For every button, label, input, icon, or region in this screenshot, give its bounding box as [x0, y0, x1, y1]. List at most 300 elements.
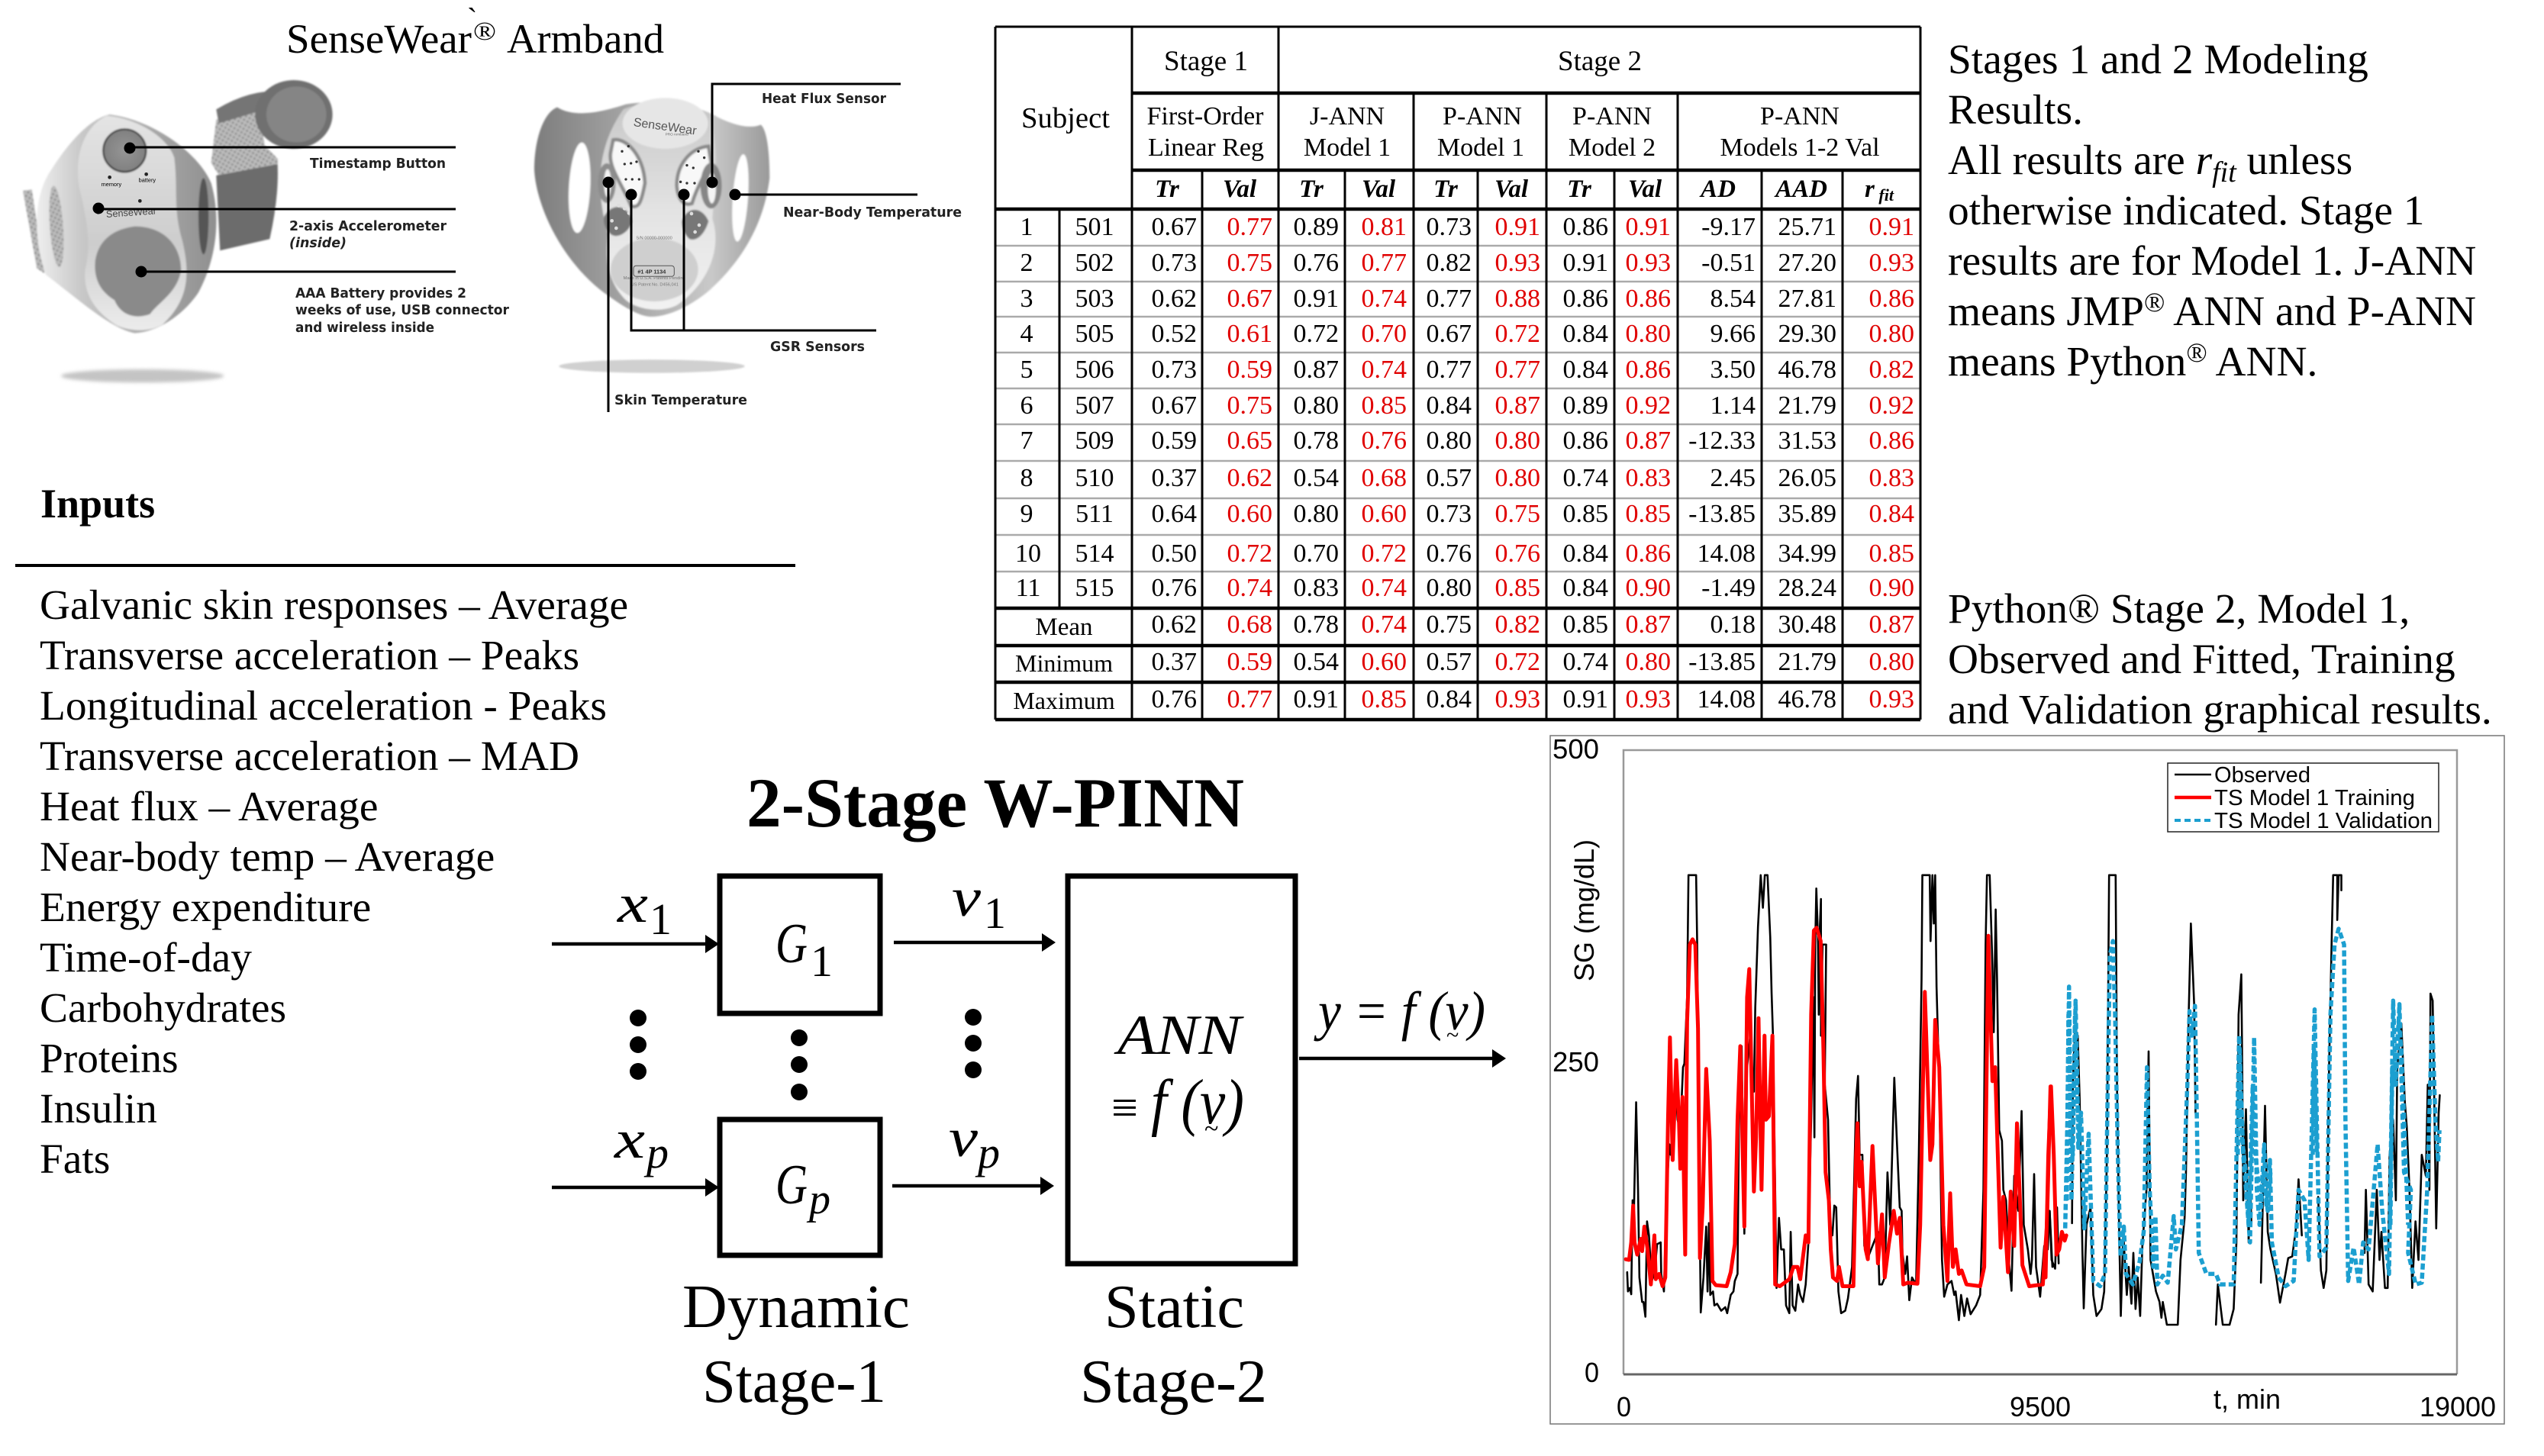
inputs list: Longitudinal acceleration - Peaks — [40, 682, 607, 729]
table summary rows: 0.18 — [1710, 610, 1756, 639]
table body rows: 46.78 — [1778, 356, 1836, 384]
table body rows: 0.77 — [1227, 213, 1272, 241]
table body rows: 0.74 — [1362, 356, 1407, 384]
chart legend: TS Model 1 Validation — [2214, 809, 2433, 833]
table summary rows: 30.48 — [1778, 610, 1836, 639]
table body rows: 0.86 — [1626, 285, 1671, 313]
table body rows: 0.75 — [1227, 391, 1272, 420]
table summary rows: 14.08 — [1698, 685, 1756, 714]
table body rows: 0.73 — [1426, 213, 1472, 241]
chart: observed vs fitted SG over time — [1550, 733, 2504, 1424]
table body rows: 3 — [1020, 285, 1033, 313]
table body rows: 0.80 — [1626, 320, 1671, 348]
table body rows: 0.91 — [1626, 213, 1671, 241]
table body rows: 0.84 — [1869, 500, 1914, 528]
table summary rows: 0.87 — [1626, 610, 1671, 639]
chart axis labels: 250 — [1553, 1046, 1599, 1078]
table body rows — [1015, 213, 1914, 602]
inputs list: Carbohydrates — [40, 984, 286, 1031]
sensor labels: GSR Sensors — [770, 339, 865, 355]
table headers: P-ANN — [1443, 102, 1522, 130]
table body rows: 0.89 — [1563, 391, 1608, 420]
table body rows: 515 — [1075, 574, 1114, 602]
table body rows: 0.74 — [1362, 285, 1407, 313]
table body rows: 0.83 — [1626, 464, 1671, 492]
table body rows: 507 — [1075, 391, 1114, 420]
table summary rows: 0.85 — [1563, 610, 1608, 639]
sensor labels: Near-Body Temperature — [783, 205, 962, 221]
table headers: Tr — [1567, 176, 1592, 203]
text block: modeling results description: All results are r — [1948, 137, 2212, 183]
text block: modeling results description: otherwise indicated. Stage 1 — [1948, 187, 2424, 234]
table body rows: 0.73 — [1151, 249, 1197, 277]
sensor labels: and wireless inside — [295, 320, 434, 336]
table summary rows: 0.37 — [1151, 648, 1197, 676]
chart frame — [1550, 736, 2504, 1424]
inputs list: Energy expenditure — [40, 884, 371, 930]
table headers: r — [1865, 176, 1875, 203]
illustration: armband back view: S/N 00000-000000 — [636, 236, 672, 240]
illustration: armband back view: SenseWear — [633, 116, 698, 138]
table body rows: 0.86 — [1869, 285, 1914, 313]
block G1 — [720, 876, 880, 1013]
table body rows: 0.84 — [1563, 574, 1608, 602]
inputs list: Proteins — [40, 1035, 179, 1081]
table grid — [995, 27, 1920, 720]
chart series — [1626, 875, 2439, 1325]
table summary rows: 0.80 — [1869, 648, 1914, 676]
table summary rows: 0.91 — [1563, 685, 1608, 714]
table body rows: 0.72 — [1293, 320, 1339, 348]
table body rows: 0.74 — [1362, 574, 1407, 602]
illustration: armband front view: battery — [139, 176, 156, 183]
table body rows: 6 — [1020, 391, 1033, 420]
chart legend: Observed — [2214, 763, 2310, 788]
table body rows: 31.53 — [1778, 427, 1836, 455]
table body rows: 1.14 — [1710, 391, 1756, 420]
inputs list — [40, 581, 628, 1182]
table body rows: 0.77 — [1426, 356, 1472, 384]
chart legend: TS Model 1 Training — [2214, 786, 2415, 810]
table body rows: 509 — [1075, 427, 1114, 455]
table body rows: 9 — [1020, 500, 1033, 528]
table summary rows: 0.85 — [1362, 685, 1407, 714]
table headers: Tr — [1299, 176, 1324, 203]
table body rows: 0.75 — [1227, 249, 1272, 277]
chart axis labels: 19000 — [2420, 1391, 2496, 1422]
table body rows: 0.84 — [1563, 320, 1608, 348]
block Gp: p — [806, 1176, 830, 1223]
table headers: Model 1 — [1437, 134, 1524, 162]
illustration: armband back view — [534, 98, 769, 373]
table headers: AD — [1699, 176, 1736, 203]
table body rows: 503 — [1075, 285, 1114, 313]
block ANN: ~ — [1204, 1115, 1218, 1143]
table headers: Model 1 — [1304, 134, 1391, 162]
table headers: First-Order — [1147, 102, 1264, 130]
block ANN — [1068, 876, 1295, 1264]
text block: modeling results description: means Python — [1948, 338, 2186, 385]
chart axis labels — [1553, 733, 2496, 1422]
stage captions: Dynamic — [682, 1272, 910, 1341]
table body rows: 0.72 — [1227, 540, 1272, 568]
table summary rows: 21.79 — [1778, 648, 1836, 676]
table body rows: 0.60 — [1227, 500, 1272, 528]
table body rows: 0.88 — [1494, 285, 1540, 313]
table body rows: 10 — [1015, 540, 1041, 568]
table summary rows: 0.93 — [1869, 685, 1914, 714]
table body rows: 0.67 — [1151, 391, 1197, 420]
table body rows: 502 — [1075, 249, 1114, 277]
table body rows: 0.62 — [1151, 285, 1197, 313]
table summary rows: 46.78 — [1778, 685, 1836, 714]
table headers: J-ANN — [1310, 102, 1385, 130]
chart axis labels: 0 — [1585, 1357, 1599, 1388]
table headers: Val — [1362, 176, 1396, 203]
table body rows: 0.84 — [1563, 540, 1608, 568]
illustration: armband back view: PRO Armband — [666, 132, 688, 136]
table summary rows: 0.57 — [1426, 648, 1472, 676]
table body rows: 0.80 — [1293, 391, 1339, 420]
text block: modeling results description: fit — [2212, 156, 2237, 188]
table headers: P-ANN — [1760, 102, 1839, 130]
table summary rows: 0.84 — [1426, 685, 1472, 714]
chart axis labels: t, min — [2214, 1384, 2281, 1415]
stage captions: Static — [1104, 1272, 1244, 1341]
table body rows: 0.90 — [1869, 574, 1914, 602]
illustration: armband front view: memory — [102, 181, 121, 188]
table body rows: 0.52 — [1151, 320, 1197, 348]
table headers: Linear Reg — [1148, 134, 1264, 162]
table summary rows: 0.87 — [1869, 610, 1914, 639]
inputs rule — [15, 564, 795, 567]
table body rows: 8 — [1020, 464, 1033, 492]
text block: modeling results description: Results. — [1948, 86, 2083, 133]
illustration: armband back view: Made in U.S.A. Patents Pending — [624, 276, 685, 281]
table body rows: 0.68 — [1362, 464, 1407, 492]
table body rows: 0.50 — [1151, 540, 1197, 568]
illustration: armband back view: #1 4P 1134 — [637, 268, 666, 275]
table body rows: 21.79 — [1778, 391, 1836, 420]
signal labels: ~ — [1446, 1023, 1459, 1048]
inputs list: Heat flux – Average — [40, 783, 378, 829]
table headers: Stage 1 — [1164, 46, 1248, 77]
table body rows: 0.87 — [1626, 427, 1671, 455]
arrows — [552, 933, 1506, 1197]
table body rows: 0.60 — [1362, 500, 1407, 528]
table body rows: 0.74 — [1227, 574, 1272, 602]
ellipsis dots — [630, 1009, 982, 1100]
table summary rows: Maximum — [1013, 687, 1115, 714]
chart legend — [2168, 763, 2439, 833]
table body rows: 0.77 — [1362, 249, 1407, 277]
table summary rows: 0.72 — [1494, 648, 1540, 676]
sensor labels: 2-axis Accelerometer — [289, 218, 447, 234]
table headers: Models 1-2 Val — [1720, 134, 1880, 162]
table body rows: 0.70 — [1362, 320, 1407, 348]
signal labels: v — [952, 867, 981, 928]
table body rows: 0.80 — [1869, 320, 1914, 348]
table body rows: 2.45 — [1710, 464, 1756, 492]
table body rows: 0.81 — [1362, 213, 1407, 241]
table headers: Subject — [1021, 102, 1110, 134]
table body rows: 0.64 — [1151, 500, 1197, 528]
table body rows: 0.85 — [1362, 391, 1407, 420]
title: SenseWear Armband: SenseWear — [286, 16, 472, 62]
table body rows: 0.82 — [1426, 249, 1472, 277]
text block: modeling results description — [1948, 36, 2476, 385]
illustration: armband front view — [23, 80, 333, 382]
table body rows: 0.87 — [1293, 356, 1339, 384]
table body rows: 0.80 — [1494, 464, 1540, 492]
signal labels: x — [614, 1109, 645, 1170]
stage captions: Stage-1 — [702, 1347, 886, 1416]
table headers: Val — [1494, 176, 1529, 203]
table body rows: 0.84 — [1563, 356, 1608, 384]
table body rows: 0.80 — [1426, 574, 1472, 602]
table body rows: 0.91 — [1563, 249, 1608, 277]
sensor labels: Timestamp Button — [310, 156, 446, 172]
table summary rows: 0.91 — [1293, 685, 1339, 714]
table body rows: 14.08 — [1698, 540, 1756, 568]
table body rows: 0.77 — [1494, 356, 1540, 384]
text block: modeling results description: means JMP — [1948, 288, 2144, 334]
table body rows: 0.86 — [1869, 427, 1914, 455]
table body rows: 2 — [1020, 249, 1033, 277]
table body rows: 9.66 — [1710, 320, 1756, 348]
title: SenseWear Armband: ` — [467, 2, 477, 36]
table body rows: 29.30 — [1778, 320, 1836, 348]
table body rows: 0.59 — [1227, 356, 1272, 384]
table body rows: 0.57 — [1426, 464, 1472, 492]
table summary rows: -13.85 — [1688, 648, 1756, 676]
text block: graphical results caption — [1948, 585, 2492, 733]
table body rows: -0.51 — [1701, 249, 1756, 277]
table summary rows: 0.74 — [1362, 610, 1407, 639]
table headers: Model 2 — [1569, 134, 1656, 162]
signal labels: v — [949, 1107, 978, 1168]
table summary rows: 0.93 — [1626, 685, 1671, 714]
sensor labels — [289, 91, 962, 408]
table headers: AAD — [1774, 176, 1827, 203]
block ANN: ≡ — [1111, 1082, 1138, 1134]
table body rows: 510 — [1075, 464, 1114, 492]
table body rows: 0.86 — [1563, 427, 1608, 455]
table body rows: 0.80 — [1494, 427, 1540, 455]
sensor labels: Heat Flux Sensor — [762, 91, 886, 107]
table body rows: 0.59 — [1151, 427, 1197, 455]
inputs list: Time-of-day — [40, 934, 252, 981]
table body rows: 0.90 — [1626, 574, 1671, 602]
table headers: Tr — [1155, 176, 1180, 203]
table body rows: 0.75 — [1494, 500, 1540, 528]
table body rows: 0.73 — [1426, 500, 1472, 528]
signal labels: p — [975, 1128, 1000, 1177]
table body rows: 5 — [1020, 356, 1033, 384]
text block: graphical results caption: and Validation graphical results. — [1948, 686, 2492, 733]
table summary rows: 0.62 — [1151, 610, 1197, 639]
table headers: Val — [1628, 176, 1662, 203]
stage captions: Stage-2 — [1080, 1347, 1267, 1416]
table headers: P-ANN — [1572, 102, 1652, 130]
chart axis labels: 9500 — [2010, 1391, 2071, 1422]
title: SenseWear Armband: ® — [473, 18, 496, 46]
table summary rows: 0.82 — [1494, 610, 1540, 639]
signal labels — [614, 867, 1485, 1177]
table body rows: 4 — [1020, 320, 1033, 348]
table summary rows — [1013, 610, 1914, 714]
table body rows: 0.92 — [1626, 391, 1671, 420]
table body rows: 0.76 — [1293, 249, 1339, 277]
table summary rows: 0.68 — [1227, 610, 1272, 639]
table body rows: 0.93 — [1494, 249, 1540, 277]
table body rows: 0.85 — [1869, 540, 1914, 568]
text block: modeling results description: ® — [2186, 337, 2207, 368]
text block: modeling results description: Stages 1 and 2 Modeling — [1948, 36, 2368, 82]
signal labels: x — [617, 873, 648, 934]
illustration: armband back view: US Patent No. D456,041 — [631, 283, 679, 288]
table body rows: 0.76 — [1426, 540, 1472, 568]
table body rows: 7 — [1020, 427, 1033, 455]
table body rows: 3.50 — [1710, 356, 1756, 384]
block G1: 1 — [811, 936, 833, 986]
table body rows: 26.05 — [1778, 464, 1836, 492]
table body rows: 505 — [1075, 320, 1114, 348]
table body rows: 0.80 — [1293, 500, 1339, 528]
table headers — [1021, 46, 1894, 205]
table body rows: 511 — [1075, 500, 1114, 528]
table body rows: 0.37 — [1151, 464, 1197, 492]
heading: Inputs: Inputs — [40, 481, 155, 527]
table body rows: 8.54 — [1710, 285, 1756, 313]
table body rows: 0.87 — [1494, 391, 1540, 420]
table body rows: 0.76 — [1151, 574, 1197, 602]
table body rows: 0.82 — [1869, 356, 1914, 384]
block Gp — [720, 1119, 880, 1255]
table body rows: 0.62 — [1227, 464, 1272, 492]
table headers: Val — [1223, 176, 1257, 203]
sensor labels: Skin Temperature — [614, 392, 747, 408]
table body rows: 0.76 — [1362, 427, 1407, 455]
table body rows: 27.81 — [1778, 285, 1836, 313]
text block: modeling results description: results are for Model 1. J-ANN — [1948, 237, 2476, 284]
text block: graphical results caption: Observed and Fitted, Training — [1948, 636, 2455, 682]
text block: modeling results description: ANN. — [2207, 338, 2317, 385]
table summary rows: 0.76 — [1151, 685, 1197, 714]
table body rows: 514 — [1075, 540, 1114, 568]
table headers: Tr — [1433, 176, 1459, 203]
chart axis labels: 500 — [1553, 733, 1599, 765]
table summary rows: 0.59 — [1227, 648, 1272, 676]
text block: graphical results caption: Python® Stage 2, Model 1, — [1948, 585, 2410, 632]
table body rows: 0.86 — [1563, 213, 1608, 241]
table body rows: 501 — [1075, 213, 1114, 241]
table body rows: 0.86 — [1626, 540, 1671, 568]
heading: 2-Stage W-PINN: 2-Stage W-PINN — [746, 764, 1244, 842]
table body rows: 0.65 — [1227, 427, 1272, 455]
sensor labels: weeks of use, USB connector — [295, 302, 509, 318]
inputs list: Near-body temp – Average — [40, 833, 495, 880]
block ANN: ANN — [1113, 1004, 1244, 1067]
table body rows: 27.20 — [1778, 249, 1836, 277]
results table — [995, 27, 1920, 720]
sensor callout lines — [93, 84, 917, 412]
table body rows: 0.86 — [1626, 356, 1671, 384]
table summary rows: 0.93 — [1494, 685, 1540, 714]
table body rows: 0.67 — [1227, 285, 1272, 313]
title: SenseWear Armband: Armband — [507, 16, 664, 62]
table body rows: 0.92 — [1869, 391, 1914, 420]
table body rows: 0.72 — [1494, 320, 1540, 348]
chart axis labels: SG (mg/dL) — [1569, 839, 1600, 981]
table body rows: 506 — [1075, 356, 1114, 384]
text block: modeling results description: ANN and P-ANN — [2165, 288, 2476, 334]
illustration: armband front view: SenseWear — [106, 205, 156, 220]
table body rows: 11 — [1016, 574, 1040, 602]
block ANN: f (v) — [1151, 1067, 1244, 1138]
table body rows: 0.93 — [1626, 249, 1671, 277]
inputs list: Transverse acceleration – MAD — [40, 733, 579, 779]
table body rows: 34.99 — [1778, 540, 1836, 568]
table summary rows: 0.80 — [1626, 648, 1671, 676]
table headers: fit — [1875, 185, 1894, 205]
table headers: Stage 2 — [1558, 46, 1642, 77]
table summary rows: Mean — [1035, 614, 1093, 641]
table body rows: 0.61 — [1227, 320, 1272, 348]
sensor labels: AAA Battery provides 2 — [295, 285, 466, 301]
inputs list: Fats — [40, 1135, 110, 1182]
table summary rows: 0.78 — [1293, 610, 1339, 639]
diagram: W-PINN block diagram — [552, 867, 1506, 1416]
table body rows: -12.33 — [1688, 427, 1756, 455]
table body rows: 0.93 — [1869, 249, 1914, 277]
signal labels: 1 — [984, 888, 1006, 938]
table body rows: 0.74 — [1563, 464, 1608, 492]
table body rows: 0.91 — [1494, 213, 1540, 241]
table body rows: 0.73 — [1151, 356, 1197, 384]
table body rows: 0.91 — [1293, 285, 1339, 313]
inputs list: Insulin — [40, 1085, 157, 1132]
table body rows: 0.85 — [1494, 574, 1540, 602]
table body rows: 0.89 — [1293, 213, 1339, 241]
table body rows: 0.54 — [1293, 464, 1339, 492]
signal labels: 1 — [650, 894, 672, 944]
table body rows: 0.83 — [1293, 574, 1339, 602]
chart axis labels: 0 — [1617, 1391, 1631, 1422]
table body rows: 0.67 — [1151, 213, 1197, 241]
table summary rows: 0.54 — [1293, 648, 1339, 676]
table body rows: 0.72 — [1362, 540, 1407, 568]
table body rows: 0.80 — [1426, 427, 1472, 455]
table body rows: 0.67 — [1426, 320, 1472, 348]
text block: modeling results description: unless — [2236, 137, 2352, 183]
table body rows: 0.91 — [1869, 213, 1914, 241]
block G1: G — [775, 913, 808, 975]
table body rows: -13.85 — [1688, 500, 1756, 528]
table summary rows: 0.60 — [1362, 648, 1407, 676]
table body rows: 0.78 — [1293, 427, 1339, 455]
table body rows: 0.76 — [1494, 540, 1540, 568]
table summary rows: 0.77 — [1227, 685, 1272, 714]
table body rows: 35.89 — [1778, 500, 1836, 528]
table body rows: 0.70 — [1293, 540, 1339, 568]
sensor labels: (inside) — [289, 235, 347, 251]
block Gp: G — [775, 1154, 808, 1216]
table summary rows: Minimum — [1015, 649, 1113, 677]
table body rows: 0.85 — [1626, 500, 1671, 528]
table body rows: -9.17 — [1701, 213, 1756, 241]
text block: modeling results description: ® — [2144, 287, 2165, 317]
